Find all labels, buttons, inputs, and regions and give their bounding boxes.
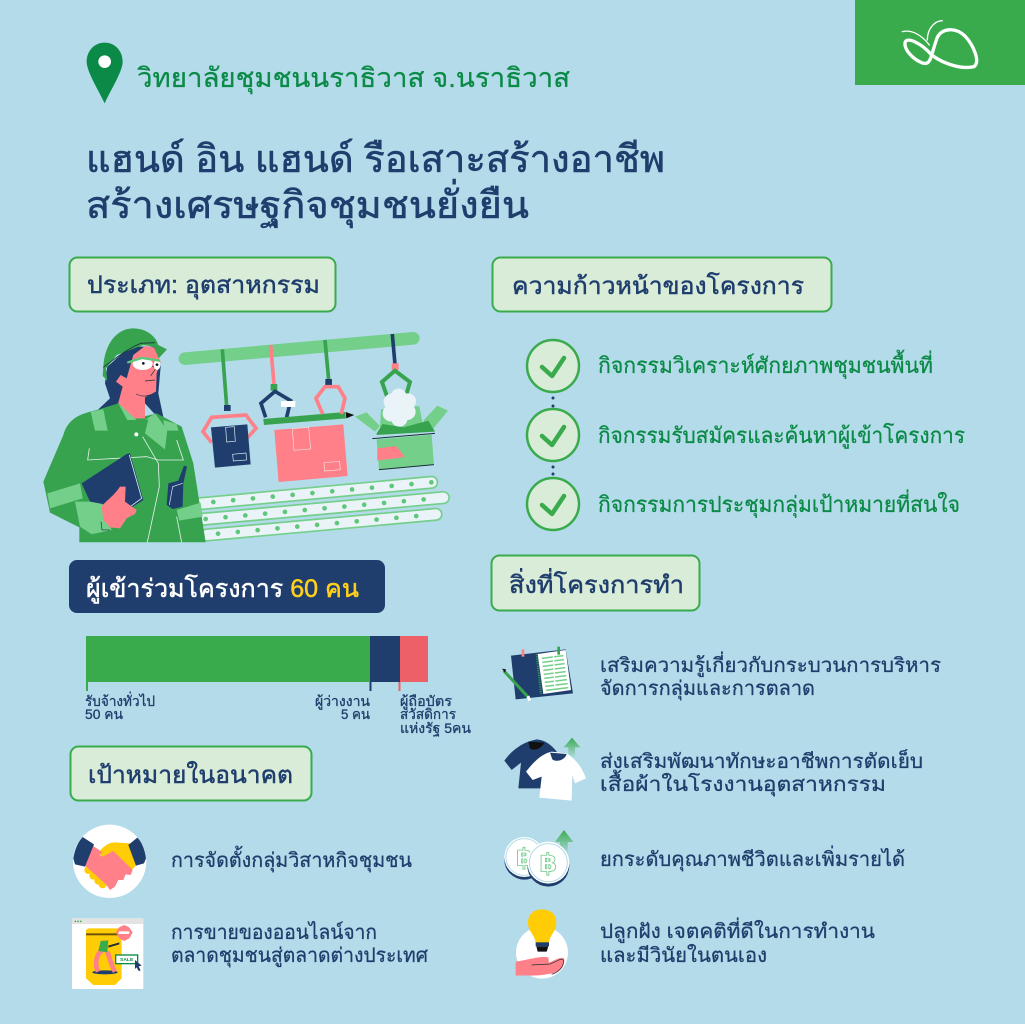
participants banner: ผู้เข้าร่วมโครงการ 60 คน: [86, 574, 359, 604]
icon: online shop: SALE: [120, 957, 134, 963]
bar label: welfare card holders: [400, 693, 471, 737]
heading: industry type: [70, 258, 336, 312]
stacked bar chart: participants: [85, 636, 471, 737]
heading: future goals: [70, 746, 312, 800]
logo block: [855, 0, 1025, 85]
heading: what the project does: [492, 556, 700, 610]
goal text: online selling: [171, 921, 428, 968]
bar label: general employed: [85, 692, 155, 722]
step 1: [527, 340, 933, 392]
location text: วิทยาลัยชุมชนนราธิวาส จ.นราธิวาส: [137, 63, 570, 95]
step 1: กิจกรรมวิเคราะห์ศักยภาพชุมชนพื้นที่: [598, 350, 933, 379]
title: แฮนด์ อิน แฮนด์ รือเสาะสร้างอาชีพ: [86, 138, 665, 181]
text: knowledge: [600, 651, 941, 701]
icon: lightbulb in hand: [516, 909, 568, 979]
step 2: [527, 409, 965, 461]
icon: shirts with arrow: [504, 738, 586, 801]
bar label: general employed: รับจ้างทั่วไป: [85, 692, 155, 709]
bar label: welfare card holders: สวัสดิการ: [400, 706, 456, 722]
icon: baht coins with arrow: ฿: [540, 847, 557, 877]
conveyor belts: [197, 482, 443, 535]
text: sewing skills: เสื้อผ้าในโรงงานอุตสาหกรรม: [600, 770, 886, 797]
overhead rail: [185, 338, 413, 359]
step 3: [527, 478, 960, 530]
robotic arm with pink box: [261, 345, 354, 482]
bar label: welfare card holders: แห่งรัฐ 5คน: [400, 720, 471, 737]
illustration: factory worker and conveyor: [43, 328, 448, 542]
heading: what the project does: สิ่งที่โครงการทำ: [509, 568, 684, 599]
heading: future goals: เป้าหมายในอนาคต: [88, 761, 293, 789]
text: income: ยกระดับคุณภาพชีวิตและเพิ่มรายได้: [600, 845, 905, 872]
icon: online shop: [72, 918, 143, 989]
text: good attitude: ปลูกฝัง เจตคติที่ดีในการทำงาน: [600, 917, 875, 944]
title: [86, 138, 665, 228]
robotic arm with navy box: [203, 349, 256, 468]
bar label: unemployed: [315, 693, 370, 722]
step 3: กิจกรรมการประชุมกลุ่มเป้าหมายที่สนใจ: [598, 489, 960, 518]
participants banner: [69, 560, 385, 613]
text: sewing skills: [600, 748, 923, 797]
woman worker: [43, 328, 206, 542]
icon: baht coins with arrow: [504, 830, 573, 887]
icon: baht coins with arrow: ฿: [516, 843, 533, 871]
bar label: welfare card holders: ผู้ถือบัตร: [400, 693, 452, 710]
bar label: general employed: 50 คน: [85, 706, 123, 722]
icon: location pin: [87, 43, 123, 103]
bar label: unemployed: ผู้ว่างงาน: [315, 693, 370, 710]
progress list: [527, 340, 965, 530]
icon: handshake: [73, 825, 146, 898]
heading: industry type: ประเภท: อุตสาหกรรม: [87, 272, 320, 300]
text: sewing skills: ส่งเสริมพัฒนาทักษะอาชีพการตัดเย็บ: [600, 748, 923, 773]
text: knowledge: เสริมความรู้เกี่ยวกับกระบวนการบริหาร: [600, 651, 941, 678]
heading: project progress: ความก้าวหน้าของโครงการ: [512, 272, 804, 300]
bar label: unemployed: 5 คน: [341, 706, 370, 722]
goal text: online selling: ตลาดชุมชนสู่ตลาดต่างประเทศ: [171, 945, 428, 968]
goal text: community enterprise: การจัดตั้งกลุ่มวิสาหกิจชุมชน: [171, 846, 412, 873]
title: สร้างเศรษฐกิจชุมชนยั่งยืน: [86, 179, 529, 228]
text: good attitude: [600, 917, 875, 967]
heading: project progress: [492, 258, 832, 312]
text: good attitude: และมีวินัยในตนเอง: [600, 944, 767, 967]
icon: notebook and pen: [502, 647, 573, 701]
robotic arm with open box: [316, 334, 448, 470]
goal text: online selling: การขายของออนไลน์จาก: [171, 921, 377, 944]
step 2: กิจกรรมรับสมัครและค้นหาผู้เข้าโครงการ: [598, 423, 965, 449]
text: knowledge: จัดการกลุ่มและการตลาด: [600, 678, 815, 701]
